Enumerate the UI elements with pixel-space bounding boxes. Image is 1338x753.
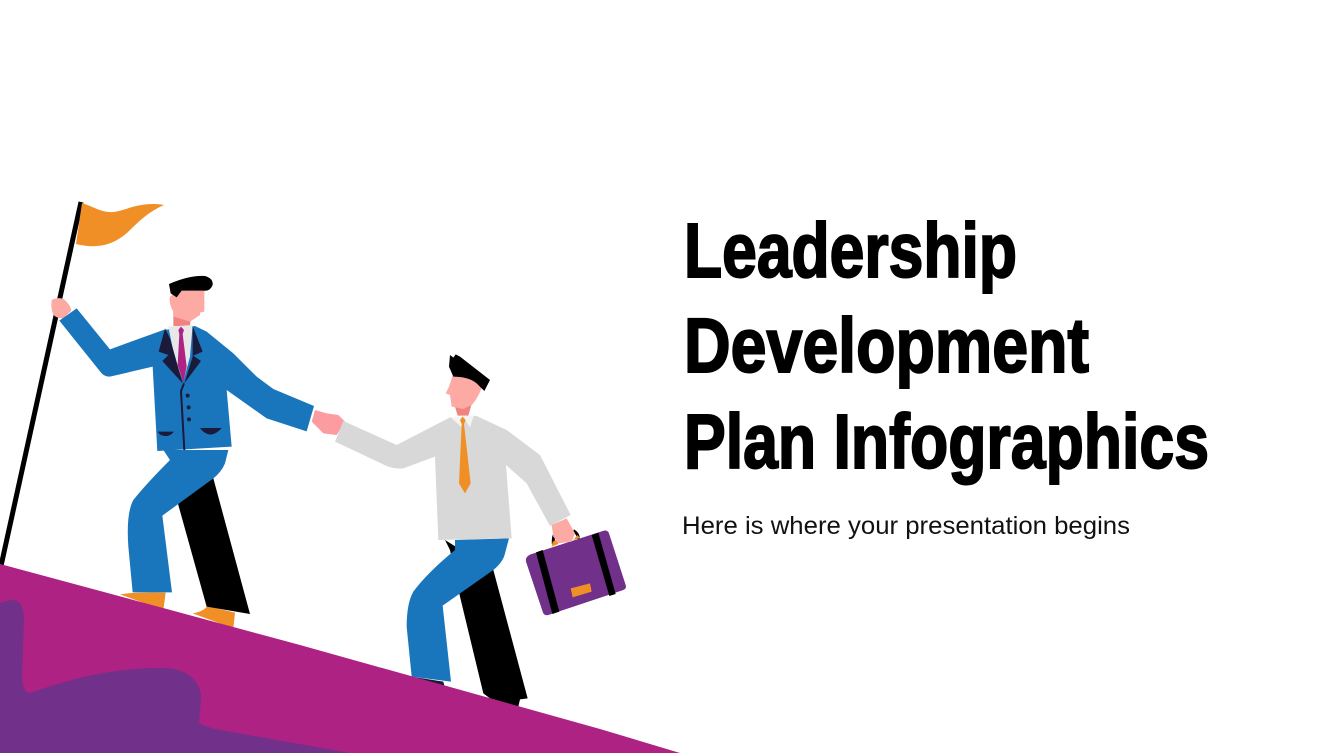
leader legs and shoes [120,450,250,628]
leader upper body [51,298,345,451]
follower other hand [552,518,575,543]
illustration: follower in grey shirt with briefcase [335,354,626,707]
icon: briefcase [526,531,626,615]
title: Leadership [684,208,1017,294]
hillside slope [0,564,680,753]
title: Development [684,303,1089,389]
title: Plan Infographics [684,399,1209,485]
follower legs [412,677,445,688]
follower shirt [335,416,571,540]
follower head [446,354,490,416]
illustration: leader in blue suit [51,276,345,628]
icon: flag on pole [1,202,164,566]
purple hill shadow [0,600,350,753]
subtitle: Here is where your presentation begins [682,512,1130,540]
leader collar, tie and jacket details [158,325,222,450]
leader head [169,276,213,326]
title [684,208,1209,485]
follower collar and tie [451,415,474,427]
